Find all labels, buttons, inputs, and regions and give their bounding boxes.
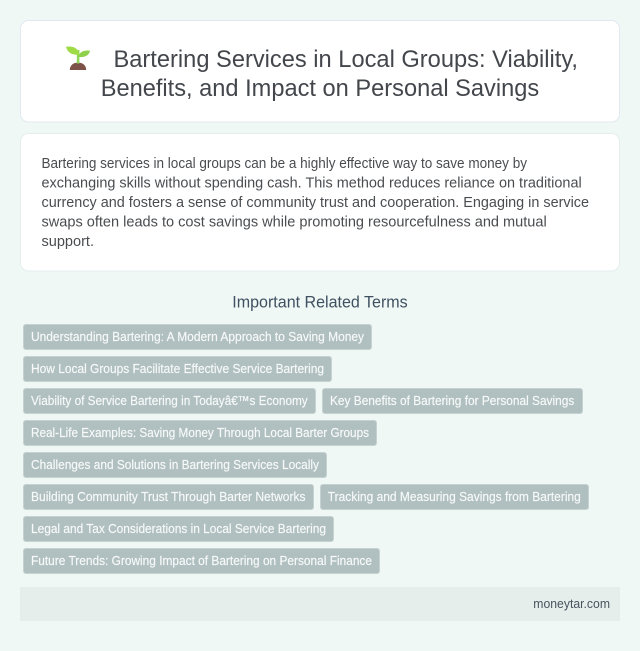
tag: local groups: How Local Groups Facilitate Effective Service Bartering	[31, 361, 324, 376]
tag: viability	[24, 388, 316, 414]
text block: intro paragraph: exchanging skills without spending cash. This method reduces reliance on traditional	[42, 176, 582, 192]
text block: intro paragraph: swaps often leads to cost savings while promoting resourcefulness and mutual	[42, 214, 547, 230]
tag: tracking savings	[320, 484, 588, 510]
tag: tracking savings: Tracking and Measuring Savings from Bartering	[328, 489, 581, 504]
footer: moneytar.com	[533, 596, 610, 611]
tag list	[24, 324, 588, 574]
panel: title card	[20, 20, 620, 122]
tag: real-life examples: Real-Life Examples: Saving Money Through Local Barter Groups	[31, 425, 369, 440]
tag: community trust: Building Community Trust Through Barter Networks	[31, 489, 306, 504]
panel: intro text card	[20, 134, 620, 271]
title: Benefits, and Impact on Personal Savings	[101, 75, 539, 102]
tag: future trends	[24, 548, 380, 574]
tag: key benefits	[322, 388, 582, 414]
text block: intro paragraph	[42, 156, 589, 250]
tag: legal and tax	[24, 516, 334, 542]
text block: intro paragraph: support.	[42, 234, 94, 250]
title	[101, 46, 578, 102]
tag: future trends: Future Trends: Growing Impact of Bartering on Personal Finance	[31, 553, 372, 568]
title: Bartering Services in Local Groups: Viability,	[114, 46, 578, 73]
tag: real-life examples	[24, 420, 376, 446]
tag: community trust	[24, 484, 314, 510]
tag: local groups	[24, 356, 332, 382]
tag: challenges	[24, 452, 326, 478]
text block: intro paragraph: currency and fosters a sense of community trust and cooperation. Engaging in service	[42, 195, 589, 211]
tag: legal and tax: Legal and Tax Considerations in Local Service Bartering	[31, 521, 326, 536]
tag: key benefits: Key Benefits of Bartering for Personal Savings	[330, 393, 574, 408]
footer	[20, 587, 620, 621]
tag: understanding bartering: Understanding Bartering: A Modern Approach to Saving Money	[31, 329, 365, 344]
tag: viability: Viability of Service Bartering in Todayâ€™s Economy	[31, 393, 308, 408]
icon: seedling	[66, 46, 90, 70]
heading: important related terms: Important Related Terms	[232, 293, 408, 311]
tag: understanding bartering	[24, 324, 372, 350]
tag: challenges: Challenges and Solutions in Bartering Services Locally	[31, 457, 320, 472]
text block: intro paragraph: Bartering services in local groups can be a highly effective way to save money by	[42, 156, 527, 172]
